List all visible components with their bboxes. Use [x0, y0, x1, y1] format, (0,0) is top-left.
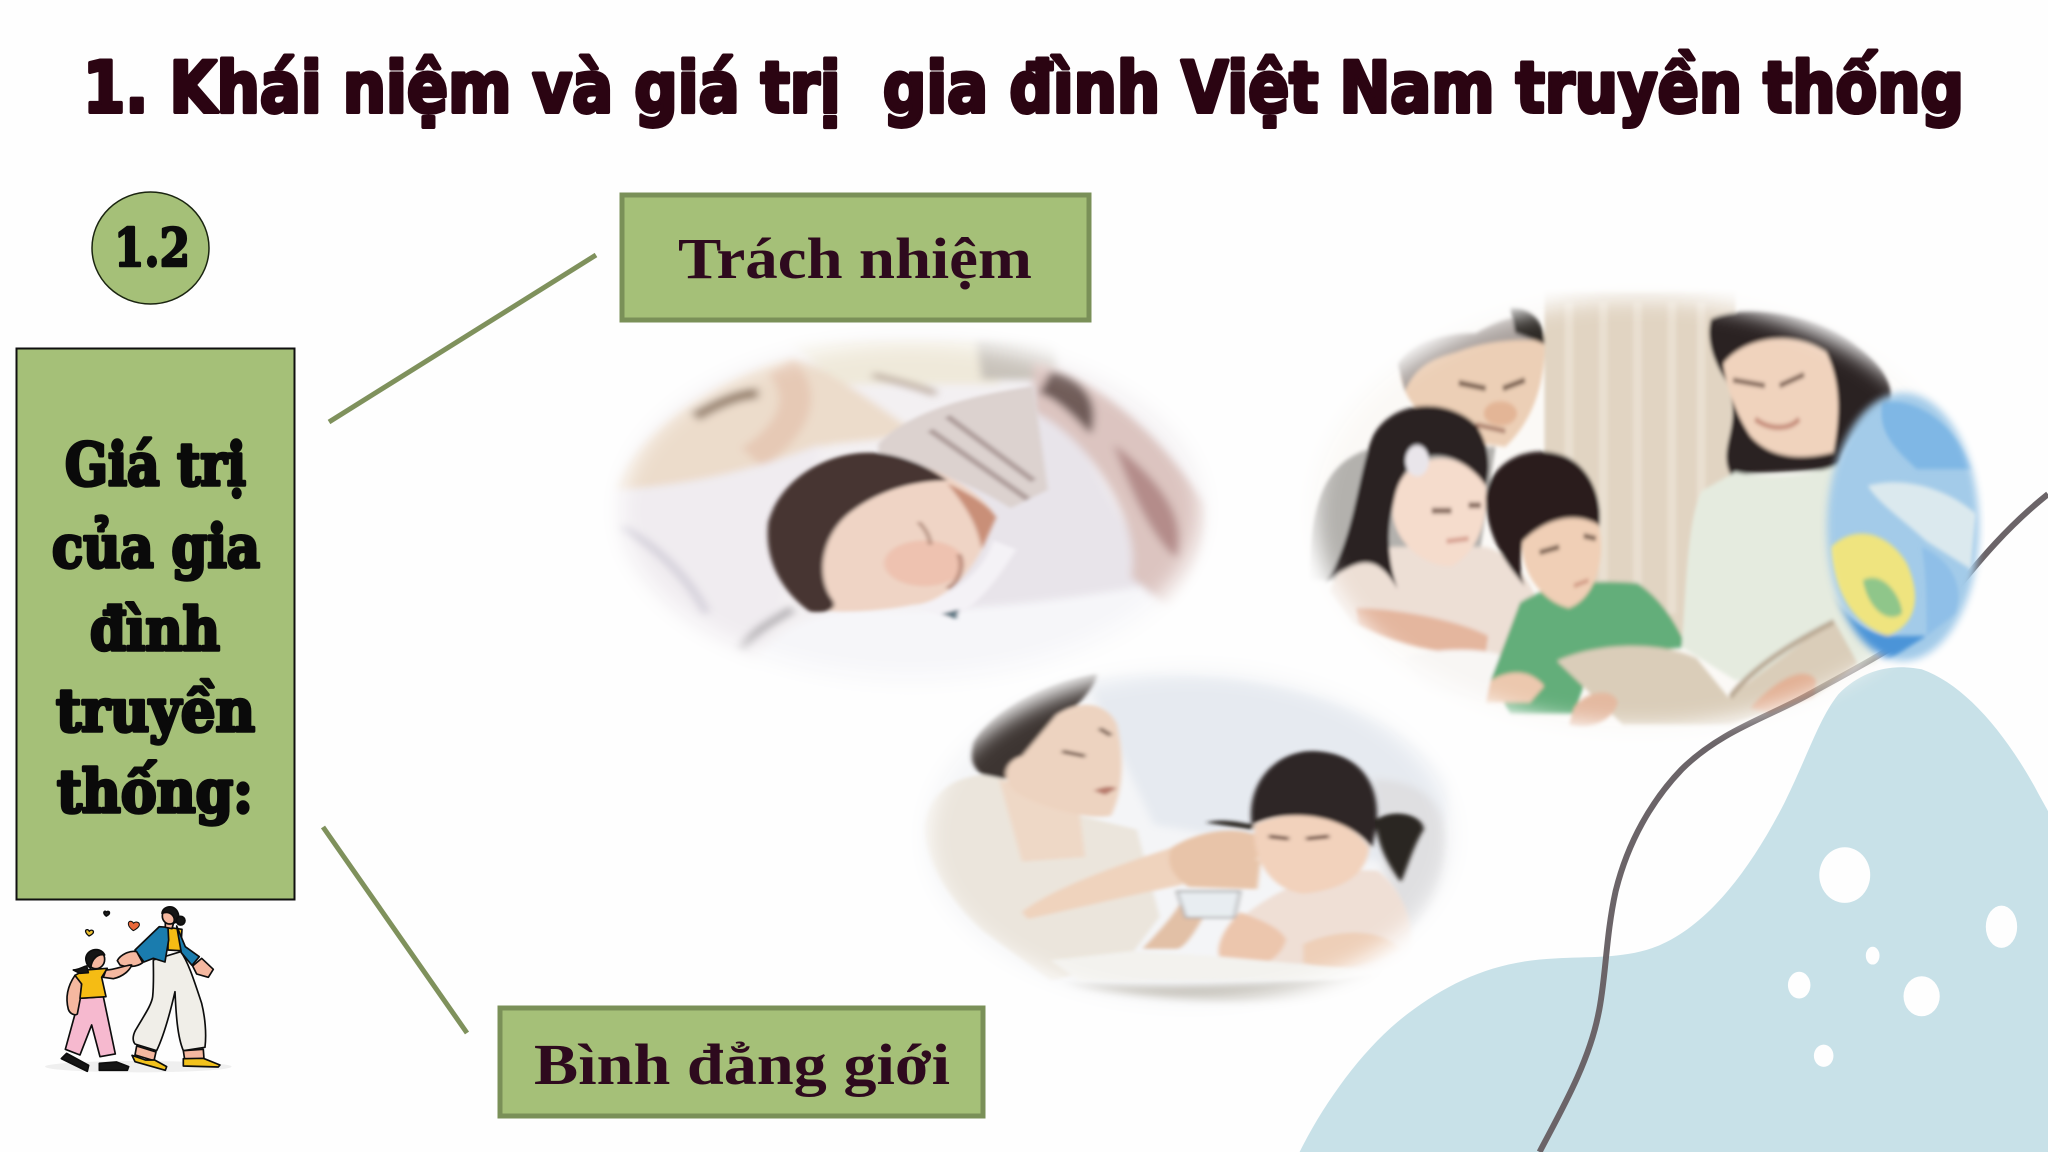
table — [1054, 952, 1342, 980]
boy — [1491, 582, 1687, 714]
panel: values of the traditional family: truyền — [56, 676, 255, 745]
girl — [1217, 870, 1412, 976]
panel: values of the traditional family: đình — [90, 595, 220, 664]
woman — [924, 774, 1160, 981]
panel: values of the traditional family: của gia — [52, 512, 260, 581]
icon: globe — [1819, 380, 1985, 675]
decorative curved line — [1540, 494, 2048, 1152]
photo: family reading a book — [1310, 291, 1894, 737]
badge 1.2 — [92, 192, 209, 304]
box: Trách nhiệm: Trách nhiệm — [678, 226, 1032, 291]
panel: values of the traditional family: thống: — [57, 757, 253, 826]
decorative blue blob with bubbles — [1300, 667, 2048, 1152]
hearts — [86, 911, 139, 936]
box: Bình đẳng giới: Bình đẳng giới — [534, 1032, 950, 1097]
panel: values of the traditional family: Giá trị — [65, 430, 246, 499]
girl — [1332, 544, 1536, 656]
connector line to Bình đẳng giới — [323, 827, 467, 1033]
panel: values of the traditional family — [16, 348, 294, 900]
mother — [1709, 311, 1891, 475]
box: Trách nhiệm — [622, 195, 1089, 320]
mother — [117, 907, 220, 1070]
cup — [1177, 891, 1240, 918]
illustration: mother and daughter holding hands — [45, 907, 232, 1072]
photo: mother feeding daughter — [925, 672, 1450, 1004]
daughter — [61, 950, 132, 1071]
photo: sleeping newborn — [617, 338, 1208, 654]
badge 1.2: 1.2 — [114, 218, 190, 279]
book — [1557, 619, 1858, 725]
connector line to Trách nhiệm — [329, 255, 596, 422]
box: Bình đẳng giới — [500, 1008, 983, 1116]
father — [1309, 447, 1496, 580]
